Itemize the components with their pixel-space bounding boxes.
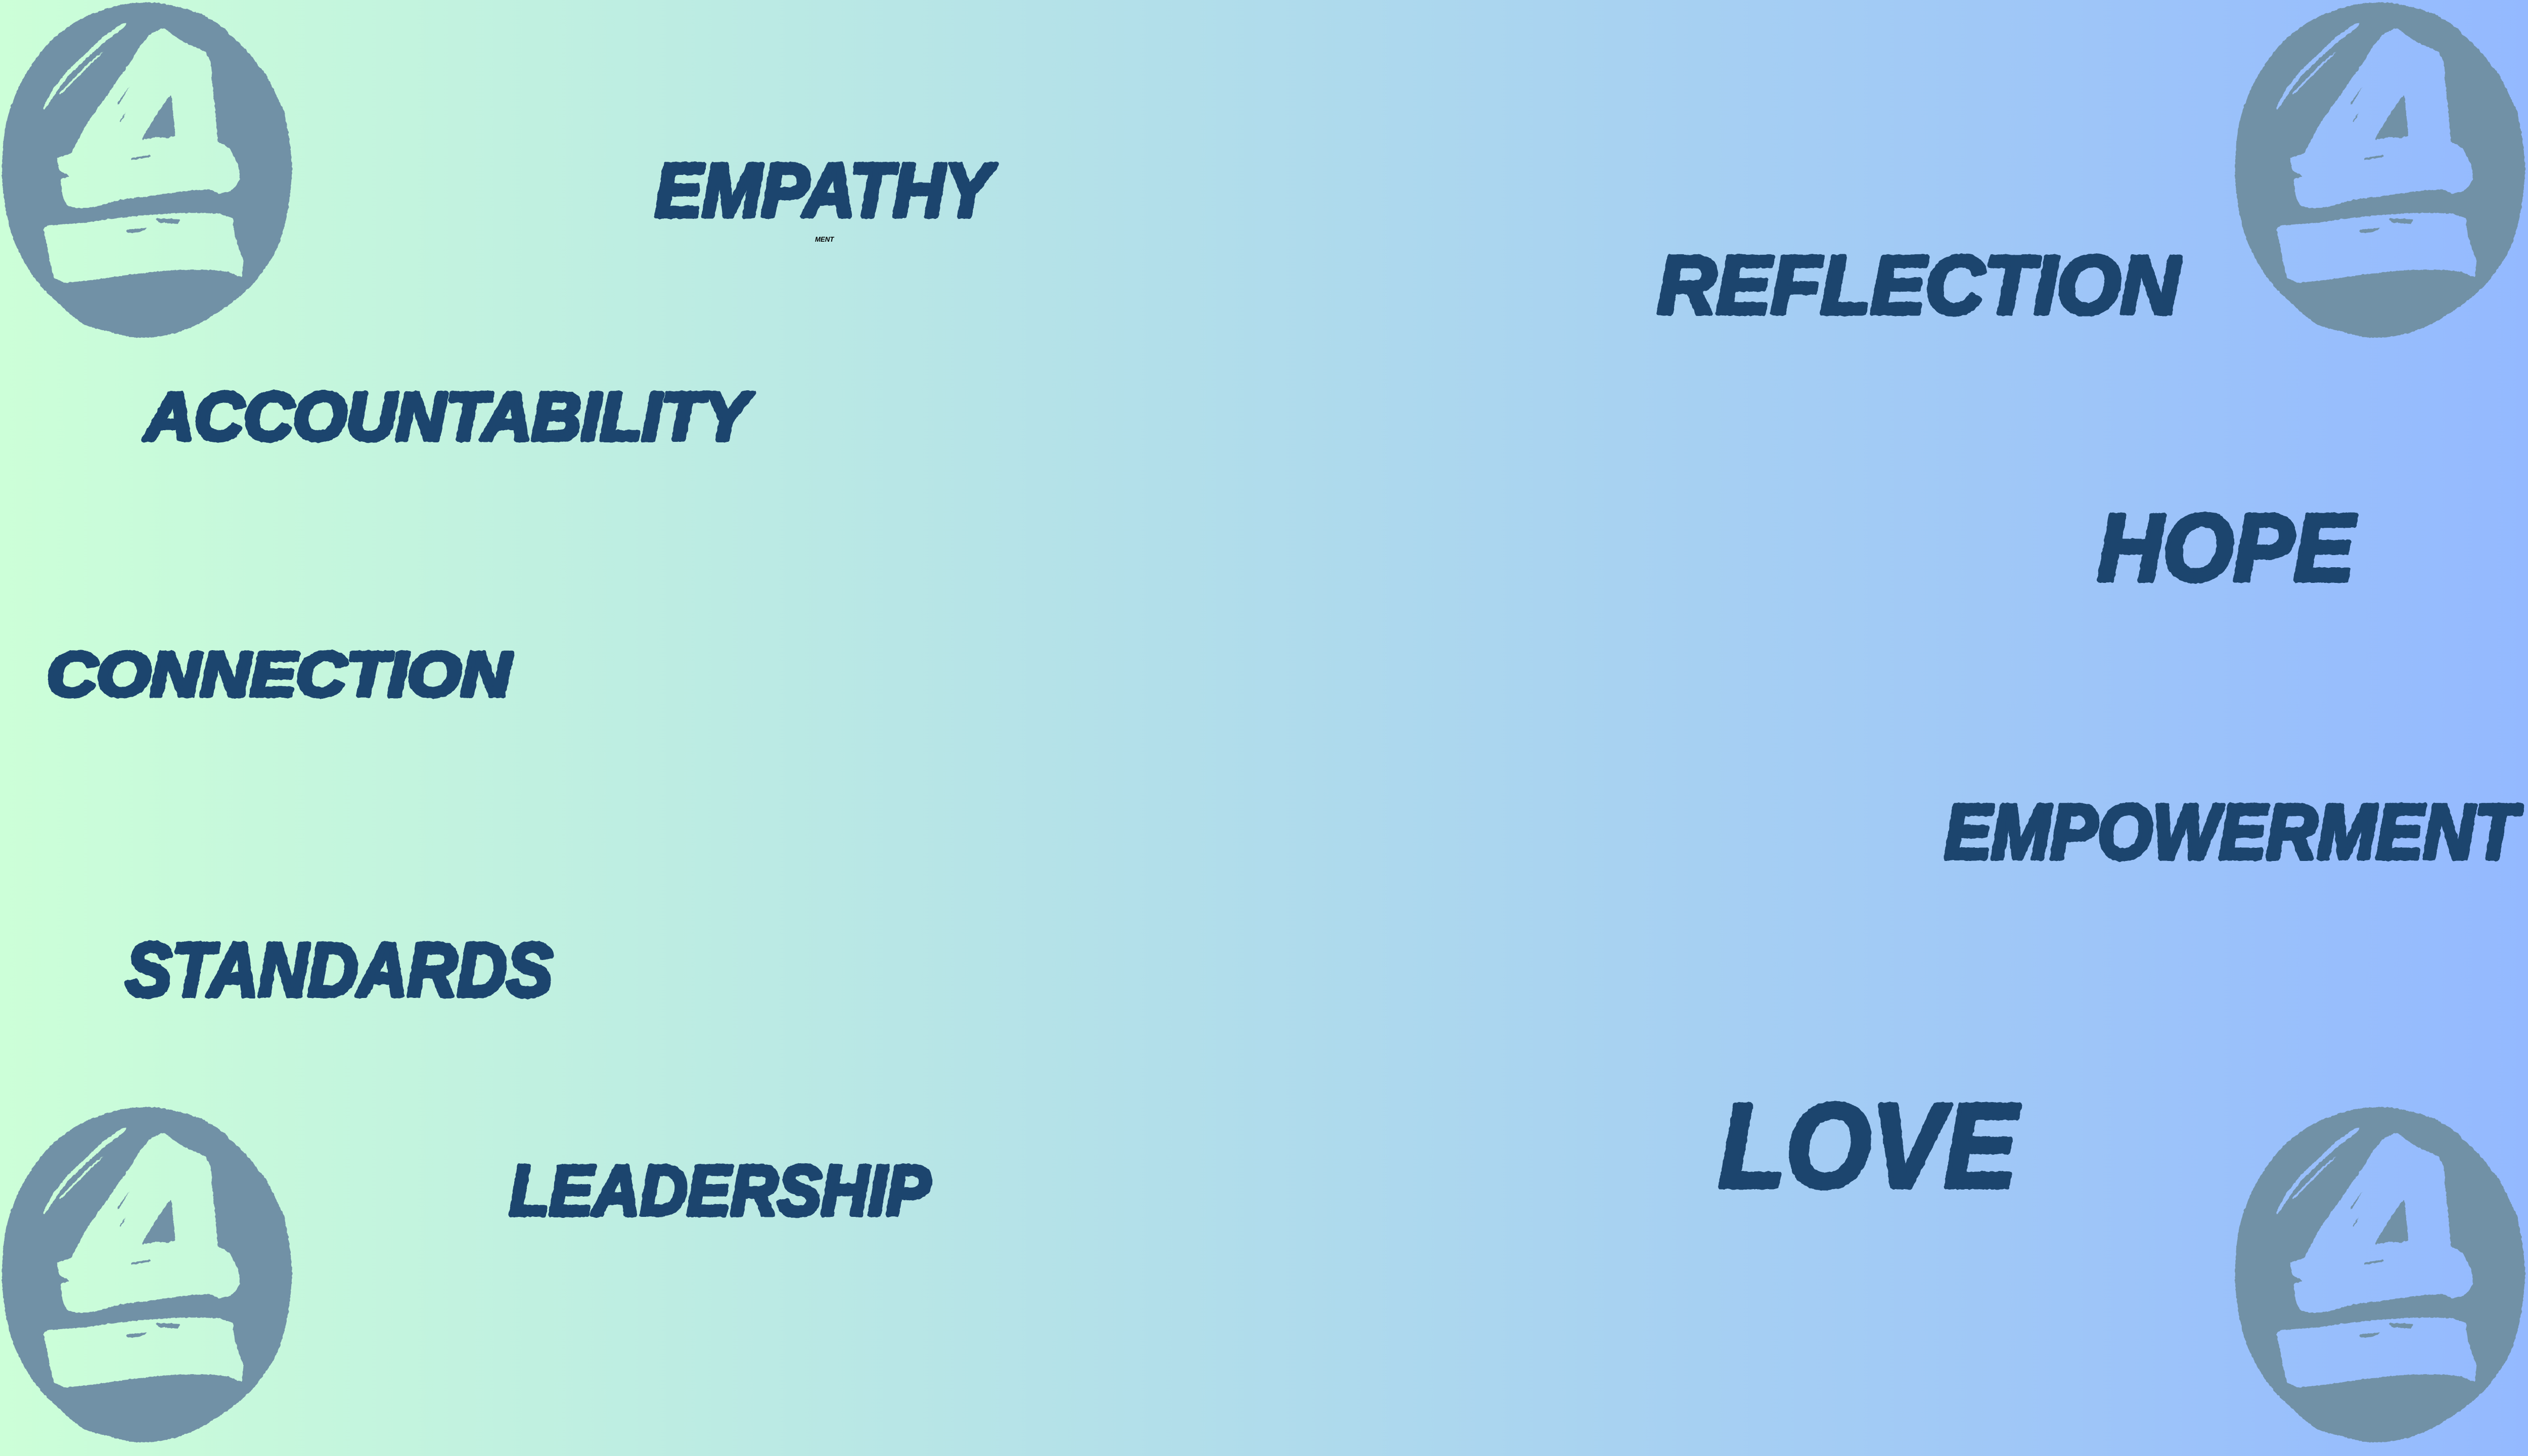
- word: accountability: ACCOUNTABILITY: [143, 378, 754, 454]
- word: reflection: REFLECTION: [1657, 240, 2181, 331]
- word: standards: STANDARDS: [126, 927, 553, 1012]
- stray small word: ment: MENT: [815, 235, 834, 243]
- icon: logo bottom left: [2, 1107, 292, 1442]
- word: connection: CONNECTION: [47, 640, 513, 709]
- word: love: LOVE: [1719, 1079, 2020, 1213]
- word: empowerment: EMPOWERMENT: [1944, 789, 2522, 875]
- word: empathy: EMPATHY: [655, 148, 998, 233]
- icon: logo top left: [2, 3, 292, 338]
- word: hope: HOPE: [2097, 495, 2357, 601]
- icon: logo bottom right: [2235, 1107, 2525, 1442]
- icon: logo top right: [2235, 3, 2525, 338]
- word: leadership: LEADERSHIP: [510, 1151, 930, 1230]
